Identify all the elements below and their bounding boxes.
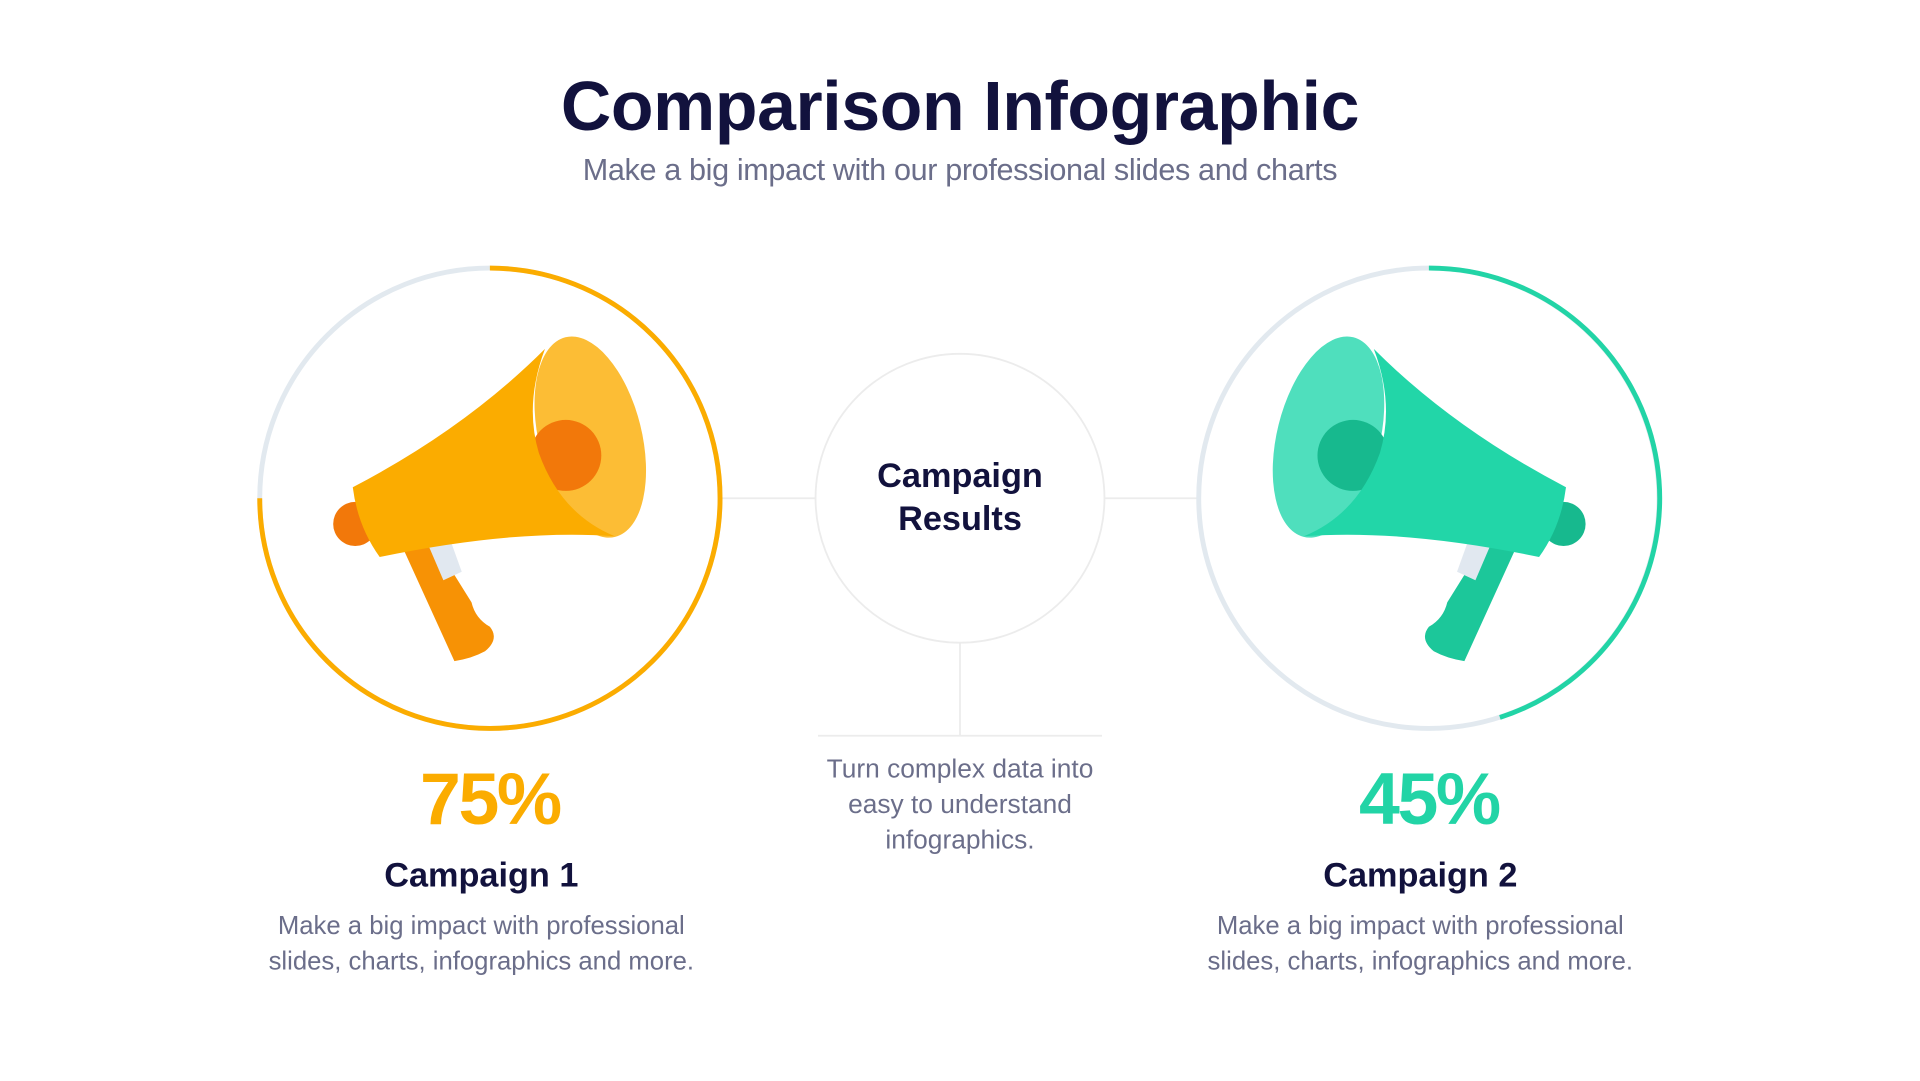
- left stat 75%: 75%: [420, 758, 561, 840]
- right progress ring 45%: [1199, 268, 1660, 728]
- right description: Make a big impact with professional: [1217, 912, 1624, 940]
- right description: slides, charts, infographics and more.: [1208, 948, 1633, 976]
- icon: left megaphone: [333, 325, 665, 661]
- right description: [1208, 912, 1633, 976]
- icon: right megaphone: [1254, 325, 1586, 661]
- right stat 45%: 45%: [1359, 758, 1500, 840]
- left heading: Campaign 1: [384, 856, 578, 894]
- center description: [827, 753, 1093, 854]
- right heading: Campaign 2: [1323, 856, 1517, 894]
- center description: infographics.: [885, 824, 1035, 854]
- center description: Turn complex data into: [827, 753, 1093, 783]
- left description: [269, 912, 694, 976]
- center circle: campaign results: Results: [898, 500, 1022, 538]
- center description: easy to understand: [848, 789, 1072, 819]
- title: Comparison Infographic: [561, 67, 1359, 145]
- connector lines: [722, 498, 1198, 736]
- left description: Make a big impact with professional: [278, 912, 685, 940]
- left progress ring 75%: [260, 268, 720, 728]
- subtitle: Make a big impact with our professional slides and charts: [583, 153, 1337, 187]
- center circle: campaign results: Campaign: [877, 457, 1043, 495]
- left description: slides, charts, infographics and more.: [269, 948, 694, 976]
- center circle: campaign results: [816, 354, 1104, 643]
